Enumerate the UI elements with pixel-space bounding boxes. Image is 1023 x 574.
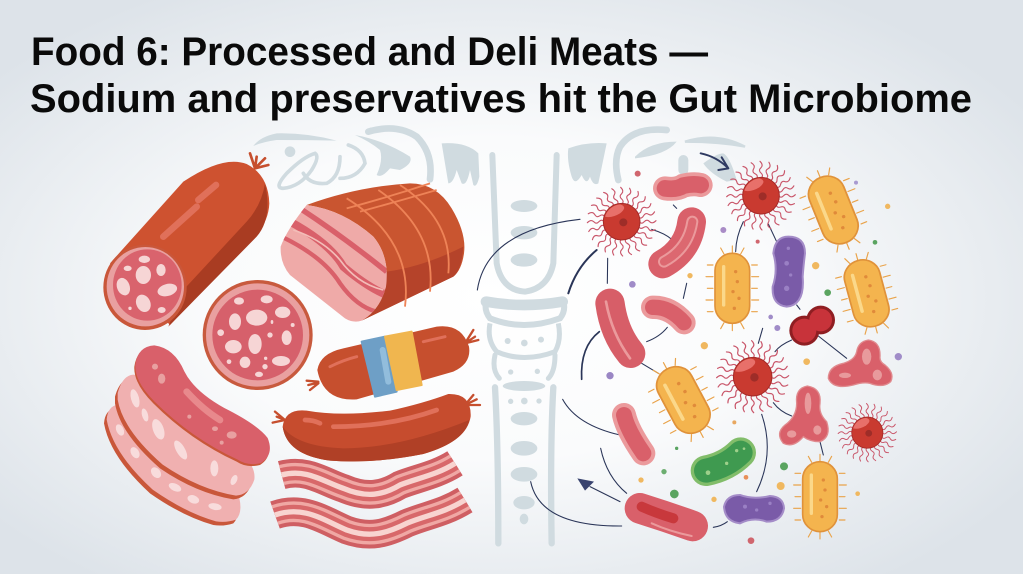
processed meats	[103, 153, 480, 534]
anatomy: upper left swirls	[253, 128, 479, 188]
title: Food 6: Processed and Deli Meats —	[31, 30, 708, 74]
sliced sausage stack	[104, 345, 270, 526]
gut anatomy silhouette	[253, 128, 745, 543]
scattered dots	[606, 171, 902, 544]
dark red dumbbell bacterium	[789, 306, 835, 346]
bacon strip bottom	[275, 500, 465, 534]
arrow: lower left	[577, 478, 594, 491]
long sausage	[273, 394, 480, 461]
pink rod bacteria	[606, 184, 701, 536]
anatomy: upper tube and right swirls	[492, 130, 745, 292]
connector lines	[477, 205, 847, 527]
orange rod bacteria	[638, 160, 904, 539]
purple bacteria	[724, 237, 805, 523]
green bacterium	[706, 447, 745, 475]
salami slice	[203, 280, 313, 390]
tri-lobed bacteria	[780, 340, 892, 445]
banded sausage	[307, 326, 478, 399]
salami log with cut face	[103, 153, 269, 330]
ham with twine	[281, 183, 464, 322]
arrow: top right	[701, 153, 728, 170]
spiky cocci	[587, 161, 897, 462]
title: Sodium and preservatives hit the Gut Microbiome	[30, 77, 972, 121]
title	[30, 30, 972, 121]
bacon strip top	[282, 463, 455, 494]
anatomy: lower spine segments	[486, 300, 564, 543]
gut microbiome	[477, 153, 904, 544]
